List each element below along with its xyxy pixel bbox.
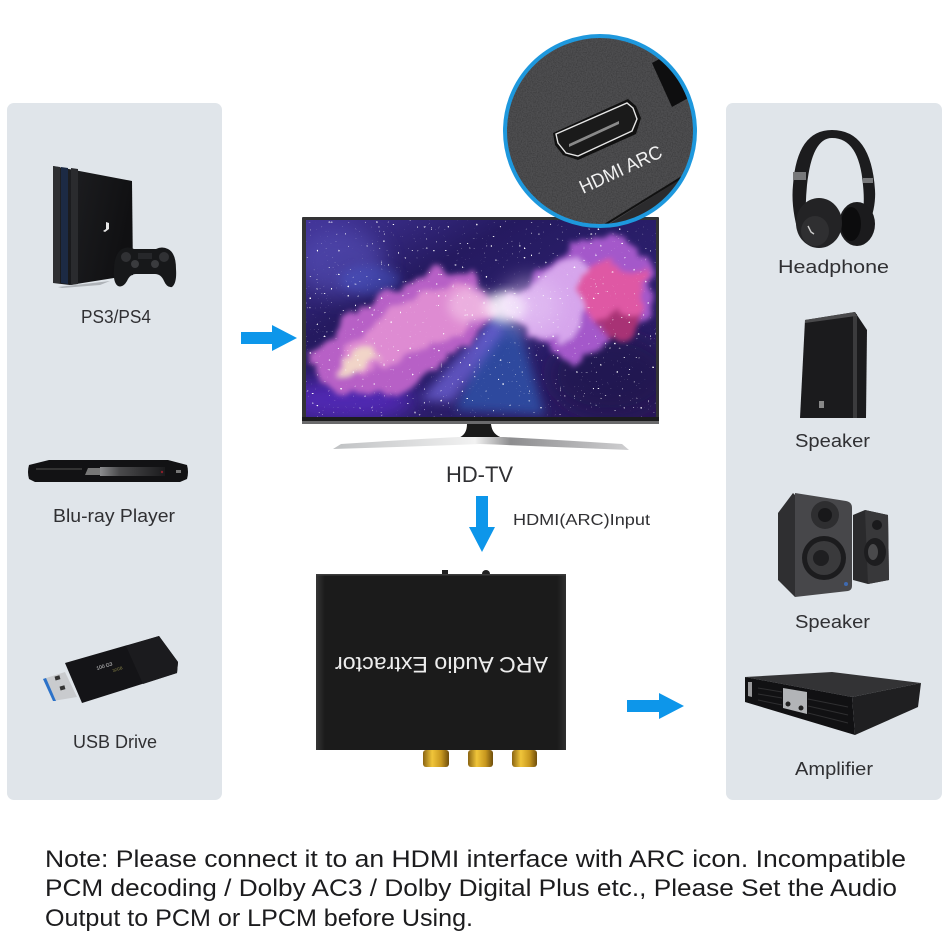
TV screen: nebula — [306, 220, 656, 417]
label: Amplifier: Amplifier — [795, 759, 873, 779]
icon: USB drive: 32GB — [112, 665, 123, 673]
arrow: TV to extractor — [469, 496, 495, 552]
icon: PA speaker — [800, 312, 867, 418]
label: USB Drive: USB Drive — [73, 732, 157, 752]
upside-down product name: ARC Audio Extractor — [335, 652, 548, 677]
icon: Blu-ray player — [28, 460, 188, 482]
label: Speaker: Speaker — [795, 612, 870, 632]
label: HD-TV: HD-TV — [446, 462, 513, 487]
ARC audio extractor box — [316, 570, 566, 767]
RCA gold connectors — [423, 750, 537, 767]
note text block: Note: Please connect it to an HDMI interface with ARC icon. Incompatible — [45, 846, 906, 873]
panel: source devices — [7, 103, 222, 800]
icon: USB drive — [43, 636, 178, 703]
label: HDMI(ARC)Input: HDMI(ARC)Input — [513, 512, 651, 529]
icon: headphone — [792, 130, 875, 248]
HDMI socket — [553, 99, 641, 160]
note text block — [45, 846, 906, 932]
icon: bookshelf speakers — [778, 493, 889, 597]
icon: USB drive: 100 G3 — [96, 661, 113, 672]
note text block: PCM decoding / Dolby AC3 / Dolby Digital Plus etc., Please Set the Audio — [45, 875, 897, 902]
label: Headphone: Headphone — [778, 257, 889, 277]
panel: output devices — [726, 103, 942, 800]
label: Speaker: Speaker — [795, 431, 870, 451]
arrow: extractor to outputs — [627, 693, 684, 719]
port label: HDMI ARC — [576, 142, 666, 199]
TV stand — [333, 424, 629, 450]
TV frame — [302, 217, 659, 424]
label: Blu-ray Player: Blu-ray Player — [53, 506, 175, 526]
top switches — [442, 570, 490, 578]
arrow: source to TV — [241, 325, 297, 351]
callout: HDMI ARC port close-up — [503, 34, 697, 228]
TV — [275, 217, 670, 450]
icon: PS4 console with controller — [53, 166, 176, 288]
label: PS3/PS4: PS3/PS4 — [81, 307, 151, 327]
icon: amplifier — [745, 672, 921, 735]
note text block: Output to PCM or LPCM before Using. — [45, 905, 473, 932]
